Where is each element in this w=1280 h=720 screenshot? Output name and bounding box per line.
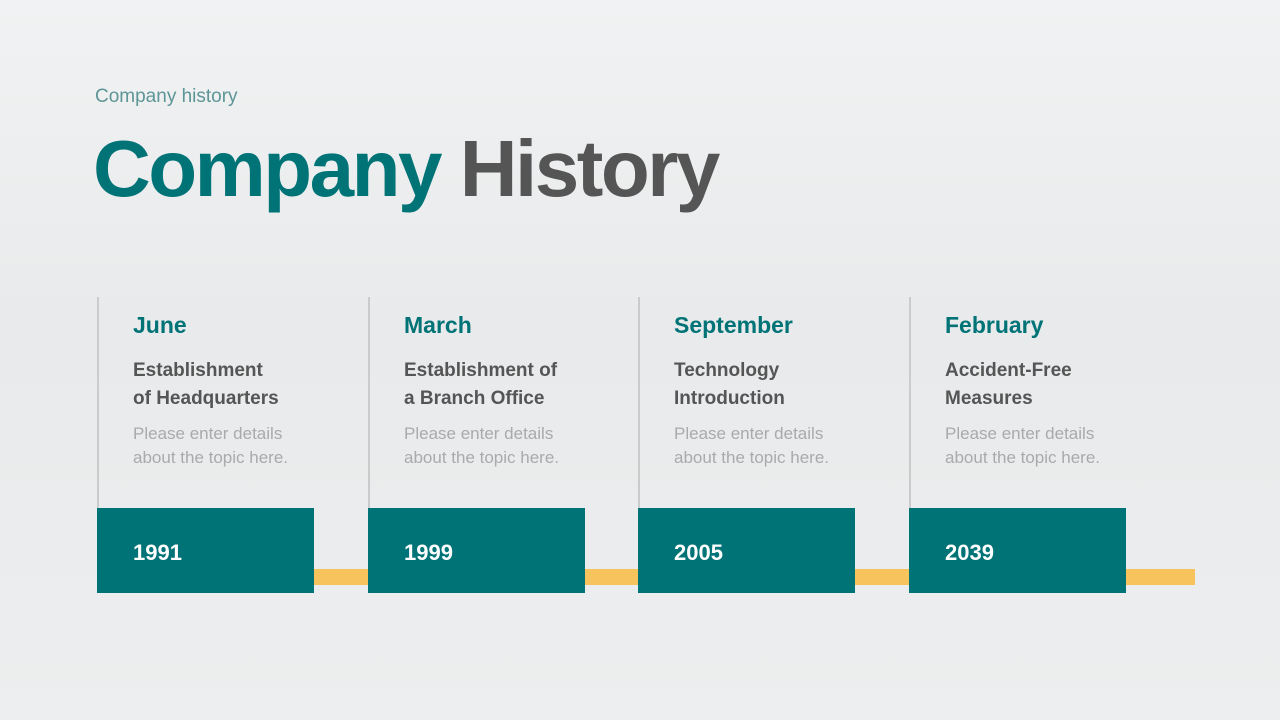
description: about the topic here. [404, 448, 559, 467]
year box [368, 508, 585, 593]
year box: 1991 [133, 540, 182, 565]
description: Please enter details [674, 424, 823, 443]
year box: 2039 [945, 540, 994, 565]
year box [97, 508, 314, 593]
description [674, 424, 829, 467]
description [404, 424, 559, 467]
month: June [133, 312, 187, 338]
heading [133, 360, 279, 409]
title: Company History [93, 124, 718, 213]
heading [945, 360, 1072, 409]
description: about the topic here. [945, 448, 1100, 467]
description: Please enter details [945, 424, 1094, 443]
heading [674, 360, 785, 409]
description: Please enter details [133, 424, 282, 443]
heading: Establishment [133, 360, 263, 381]
milestone 2005 [638, 297, 855, 593]
year box: 2005 [674, 540, 723, 565]
month: September [674, 312, 793, 338]
milestone 2039 [909, 297, 1126, 593]
heading: Technology [674, 360, 779, 381]
heading: of Headquarters [133, 388, 279, 409]
milestone 1999 [368, 297, 585, 593]
timeline bar [314, 569, 1195, 585]
description: about the topic here. [133, 448, 288, 467]
heading [404, 360, 558, 409]
year box [909, 508, 1126, 593]
description: Please enter details [404, 424, 553, 443]
heading: a Branch Office [404, 388, 544, 409]
year box: 1999 [404, 540, 453, 565]
subtitle: Company history [95, 86, 238, 107]
milestone 1991 [97, 297, 314, 593]
heading: Accident-Free [945, 360, 1072, 381]
month: March [404, 312, 472, 338]
month: February [945, 312, 1043, 338]
description [133, 424, 288, 467]
heading: Establishment of [404, 360, 557, 381]
heading: Introduction [674, 388, 785, 409]
year box [638, 508, 855, 593]
description: about the topic here. [674, 448, 829, 467]
heading: Measures [945, 388, 1033, 409]
description [945, 424, 1100, 467]
